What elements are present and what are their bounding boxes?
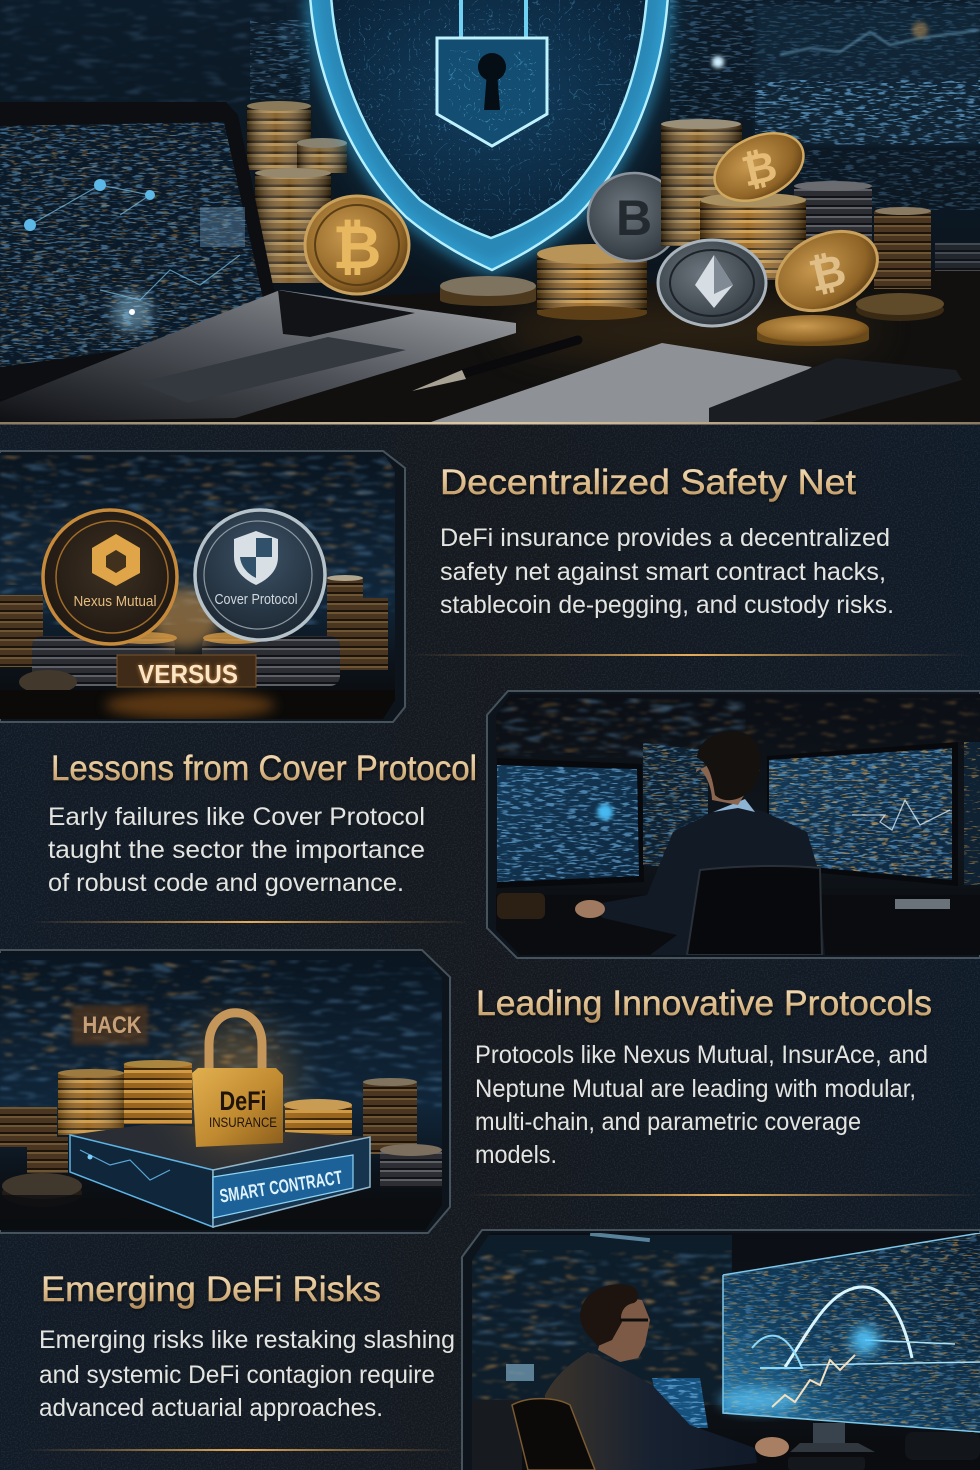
office chair — [687, 866, 822, 955]
large monitor with curves — [720, 1233, 980, 1432]
hero image: shield, laptop and coins — [0, 0, 980, 422]
text block: Emerging DeFi Risks: Emerging DeFi Risks — [42, 1272, 382, 1311]
Nexus Mutual coin — [43, 510, 177, 644]
background screens — [472, 1232, 732, 1410]
desk surface — [336, 270, 980, 336]
bitcoin coin right: ₿ — [805, 246, 851, 301]
shield glow — [310, 0, 668, 270]
body copy: multi-chain, and parametric coverage — [475, 1108, 861, 1136]
body copy: DeFi insurance provides a decentralized — [440, 524, 890, 552]
gold padlock: INSURANCE — [209, 1114, 277, 1130]
tilted bitcoin coin — [713, 132, 805, 202]
Cover Protocol coin: Cover Protocol — [214, 592, 298, 608]
text block: Lessons from Cover Protocol — [48, 749, 478, 897]
bitcoin coin left: ₿ — [333, 214, 381, 281]
text block: Emerging DeFi Risks — [39, 1270, 455, 1422]
body copy: Early failures like Cover Protocol — [48, 803, 425, 831]
heading: Emerging DeFi Risks — [41, 1270, 381, 1309]
heading: Leading Innovative Protocols — [476, 984, 932, 1023]
text block: Decentralized Safety Net: Decentralized Safety Net — [441, 465, 857, 504]
coin stacks — [0, 1060, 442, 1207]
desk and devices — [472, 1378, 980, 1470]
ethereum coin — [658, 240, 766, 326]
laptop — [0, 102, 516, 422]
body copy: Emerging risks like restaking slashing — [39, 1326, 455, 1354]
heading: Decentralized Safety Net — [440, 463, 856, 502]
flat coin centre — [440, 276, 536, 306]
analyst figure — [545, 1284, 789, 1470]
text block: Leading Innovative Protocols — [475, 984, 933, 1169]
body copy: taught the sector the importance — [48, 836, 425, 864]
silver bitcoin coin — [588, 173, 680, 261]
flat coins right — [757, 293, 944, 346]
body copy: Neptune Mutual are leading with modular, — [475, 1075, 916, 1103]
heading: Lessons from Cover Protocol — [51, 749, 477, 788]
Cover Protocol coin — [195, 510, 325, 640]
VERSUS label: VERSUS — [138, 659, 238, 689]
pen — [412, 340, 578, 391]
body copy: Protocols like Nexus Mutual, InsurAce, and — [475, 1041, 928, 1069]
VERSUS label — [117, 655, 256, 689]
body copy — [39, 1326, 455, 1422]
panel: Nexus Mutual versus Cover Protocol image — [0, 451, 405, 722]
office chair — [512, 1399, 595, 1470]
hero divider — [0, 422, 980, 424]
padlock — [437, 0, 547, 146]
body copy: stablecoin de-pegging, and custody risks. — [440, 591, 894, 619]
smart contract box — [70, 1124, 370, 1227]
analyst figure — [575, 731, 825, 955]
VERSUS label: VERSUS — [138, 659, 238, 689]
body copy: of robust code and governance. — [48, 869, 404, 897]
coin stacks — [0, 575, 388, 694]
panel: DeFi insurance padlock image — [0, 950, 450, 1233]
body copy: and systemic DeFi contagion require — [39, 1361, 435, 1389]
background data screens — [0, 0, 980, 210]
body copy — [48, 803, 425, 897]
smart contract label — [213, 1155, 353, 1218]
silver bitcoin coin: B — [616, 190, 652, 246]
calculator — [709, 358, 962, 422]
body copy: safety net against smart contract hacks, — [440, 558, 886, 586]
gold padlock: DeFi — [220, 1086, 266, 1116]
body copy: models. — [475, 1141, 557, 1169]
tilted bitcoin coin: ₿ — [737, 142, 781, 195]
text block: Decentralized Safety Net — [440, 463, 894, 619]
HACK sign — [72, 1005, 148, 1045]
left coin stacks — [247, 101, 347, 283]
body copy — [440, 524, 894, 619]
bitcoin coin left — [305, 196, 409, 294]
HACK sign: HACK — [82, 1012, 142, 1039]
shield — [310, 0, 668, 270]
panel: analyst at monitors image — [487, 691, 980, 958]
right coin stacks — [661, 119, 980, 289]
monitors — [497, 742, 980, 888]
gold padlock — [192, 1013, 283, 1147]
body copy — [475, 1041, 928, 1169]
text block: Leading Innovative Protocols: Leading Innovative Protocols — [477, 986, 933, 1025]
panel: analyst with risk curves image — [462, 1230, 980, 1470]
document papers — [431, 343, 812, 422]
bitcoin coin right — [775, 230, 879, 312]
body copy: advanced actuarial approaches. — [39, 1394, 383, 1422]
Nexus Mutual coin: Nexus Mutual — [74, 593, 156, 610]
text block: Lessons from Cover Protocol: Lessons from Cover Protocol — [52, 751, 478, 790]
smart contract label: SMART CONTRACT — [218, 1167, 344, 1208]
centre coin stack — [537, 244, 647, 320]
